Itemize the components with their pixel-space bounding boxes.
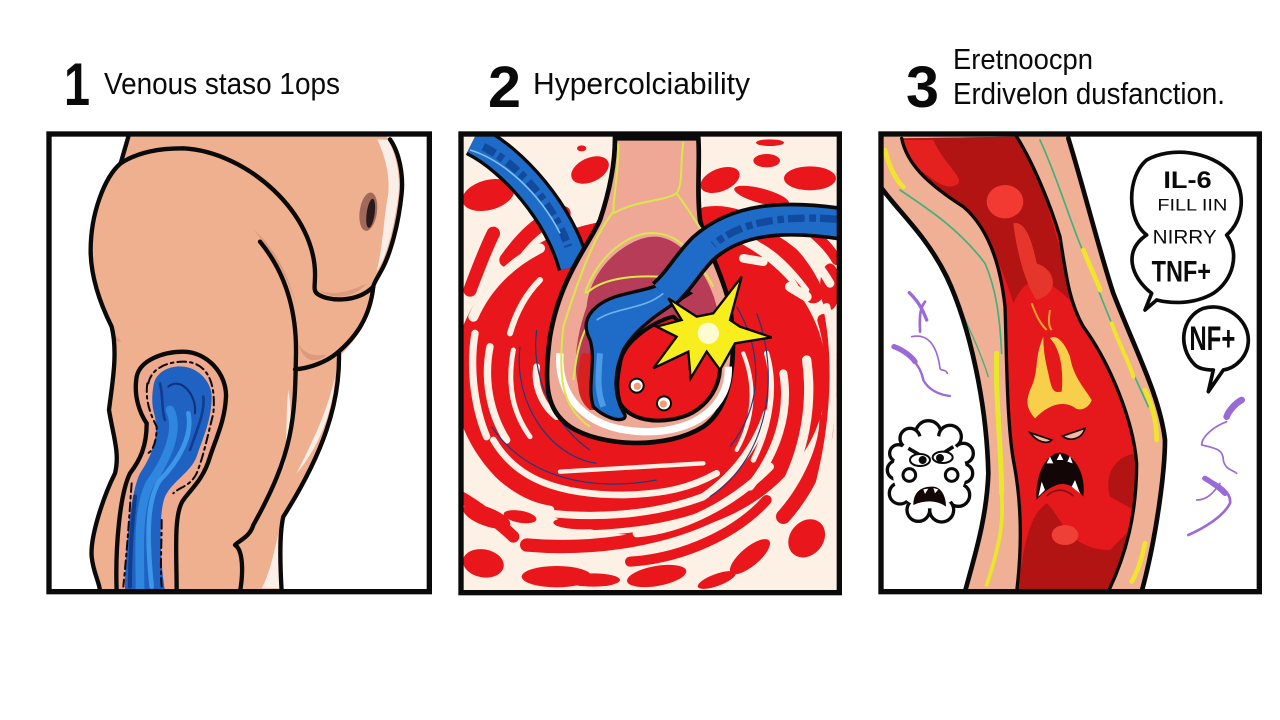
red cavity shadow <box>578 353 594 410</box>
heading 3: endothelial dysfunction: Erdivelon dusfanction. <box>953 76 1225 111</box>
outer red bands <box>460 203 837 562</box>
body outlines <box>91 137 402 592</box>
yellow green membrane lines <box>561 142 713 427</box>
speech bubble: cytokines: TNF+ <box>1152 255 1211 288</box>
valve inner ring <box>560 353 728 432</box>
flame mark <box>1027 337 1092 418</box>
speech bubble: cytokines <box>1132 152 1241 310</box>
red swirl mass <box>453 218 827 535</box>
vessel wall <box>878 137 1165 593</box>
skin fold shading <box>113 229 367 360</box>
red clot <box>617 317 720 421</box>
heading 3: endothelial dysfunction <box>906 44 1225 120</box>
torso and leg silhouette <box>91 137 402 592</box>
speech bubble: cytokines: NIRRY <box>1153 227 1217 248</box>
purple squiggles left <box>894 293 950 396</box>
heading 2: hypercoagulability: 2 <box>488 55 521 120</box>
heading 1: venous stasis: 1 <box>64 51 90 118</box>
navel <box>359 192 378 231</box>
panel 1: leg with stagnant vein <box>49 134 429 592</box>
yellow burst <box>653 277 772 378</box>
speech bubble: NF: NF+ <box>1189 320 1235 358</box>
heading 2: hypercoagulability <box>488 55 750 120</box>
heading 3: endothelial dysfunction: 3 <box>906 55 939 120</box>
cream streaks through the swirl <box>467 227 833 533</box>
speech bubble: cytokines: FILL IIN <box>1157 196 1227 215</box>
speech bubble: NF <box>1184 307 1248 392</box>
vein inner dashes <box>123 362 214 587</box>
angry face <box>1030 428 1085 545</box>
heading 1: venous stasis: Venous staso 1ops <box>104 66 340 101</box>
vessel lumen <box>903 136 1135 589</box>
wall inner accent lines <box>885 140 1157 585</box>
thin dark swirl lines <box>492 307 768 497</box>
heading 1: venous stasis <box>64 51 340 118</box>
dark valve cavity <box>576 237 717 413</box>
trapped cells <box>630 379 671 410</box>
scattered red cell blobs <box>459 139 840 592</box>
vein valve sac <box>547 138 733 443</box>
vessel outlines <box>882 137 1165 592</box>
stagnant blue blood <box>125 366 212 592</box>
panel 3: inflamed vessel and cytokines <box>870 120 1259 603</box>
vein wall <box>116 352 226 592</box>
speech bubble: cytokines: IL-6 <box>1163 167 1212 194</box>
heading 3: endothelial dysfunction: Eretnoocpn <box>953 44 1093 76</box>
upper left blue vein <box>470 140 574 267</box>
purple squiggles right <box>1188 400 1242 535</box>
frame 3 <box>881 134 1259 592</box>
frame 2 <box>461 134 839 593</box>
frame 1 <box>49 134 429 592</box>
blue vein entering clot <box>586 218 843 420</box>
angry white cell <box>887 421 973 522</box>
heading 2: hypercoagulability: Hypercolciability <box>533 66 750 101</box>
panel 2: clot in a valve pocket <box>453 134 843 593</box>
skin highlights <box>262 139 399 588</box>
